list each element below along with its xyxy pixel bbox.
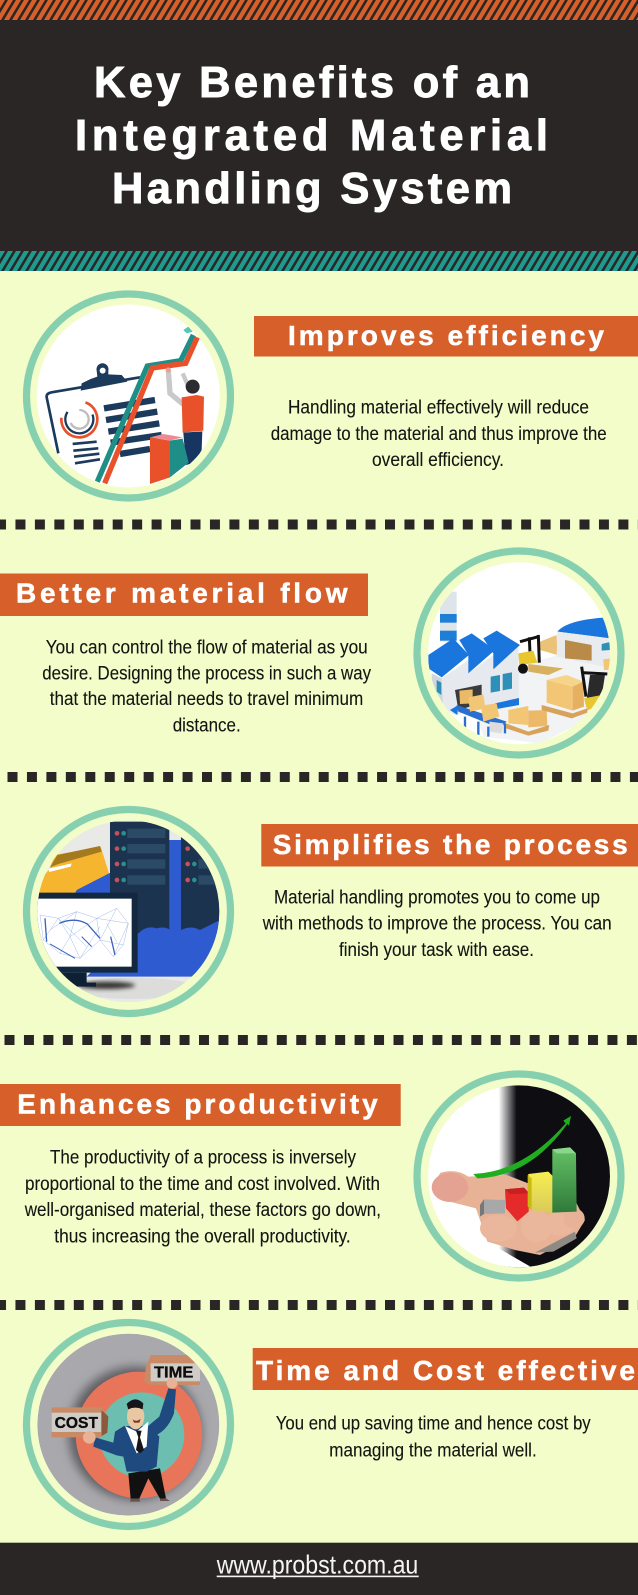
text block: well-organised material, these factors go down, [24,1199,381,1221]
text block: that the material needs to travel minimum [50,688,363,710]
footer band with website [0,1543,638,1595]
panel: simplifies the process [26,810,638,1014]
footer band with website: www.probst.com.au [216,1549,418,1579]
panel: better material flow [0,551,621,755]
teal striped strip [0,251,638,271]
title: Integrated Material [75,112,548,160]
text block: You end up saving time and hence cost by [276,1412,591,1434]
heading bar [254,316,638,356]
text block: distance. [173,715,241,737]
heading bar [261,824,638,866]
header band [0,0,638,271]
orange striped strip [0,0,638,20]
text block: You can control the flow of material as you [46,636,368,658]
text block [24,1146,381,1247]
text block: The productivity of a process is inversely [50,1146,356,1168]
heading bar: Improves efficiency [288,320,604,351]
icon: clipboard and rising chart [26,294,230,498]
heading bar: Better material flow [16,578,348,609]
icon: hand holding rising bar chart [417,1074,621,1278]
title: Handling System [112,165,512,213]
text block: managing the material well. [329,1440,537,1462]
panel: improves efficiency [26,294,638,498]
icon: servers, cloud, folder and monitor [26,810,230,1014]
icon: businessman lifting time and cost boxes [26,1322,230,1526]
heading bar: Time and Cost effective [256,1355,635,1386]
text block: desire. Designing the process in such a way [42,662,371,684]
heading bar: Enhances productivity [17,1088,378,1119]
title [75,59,548,213]
text block [42,636,371,737]
text block: thus increasing the overall productivity. [54,1225,351,1247]
text block: overall efficiency. [372,449,504,471]
panel: enhances productivity [0,1074,621,1278]
heading bar [0,1084,401,1126]
text block [276,1412,591,1462]
icon: businessman lifting time and cost boxes: TIME [154,1364,193,1381]
text block [262,886,612,961]
title: Key Benefits of an [94,59,530,107]
text block [271,396,607,471]
text block: Handling material effectively will reduce [288,396,589,418]
panel: time and cost effective [26,1322,638,1526]
icon: businessman lifting time and cost boxes: COST [55,1415,98,1432]
text block: proportional to the time and cost involved. With [25,1173,380,1195]
heading bar [0,574,368,616]
heading bar: Simplifies the process [273,829,628,860]
icon: factory and warehouse with forklifts [417,551,621,755]
text block: finish your task with ease. [339,939,534,961]
